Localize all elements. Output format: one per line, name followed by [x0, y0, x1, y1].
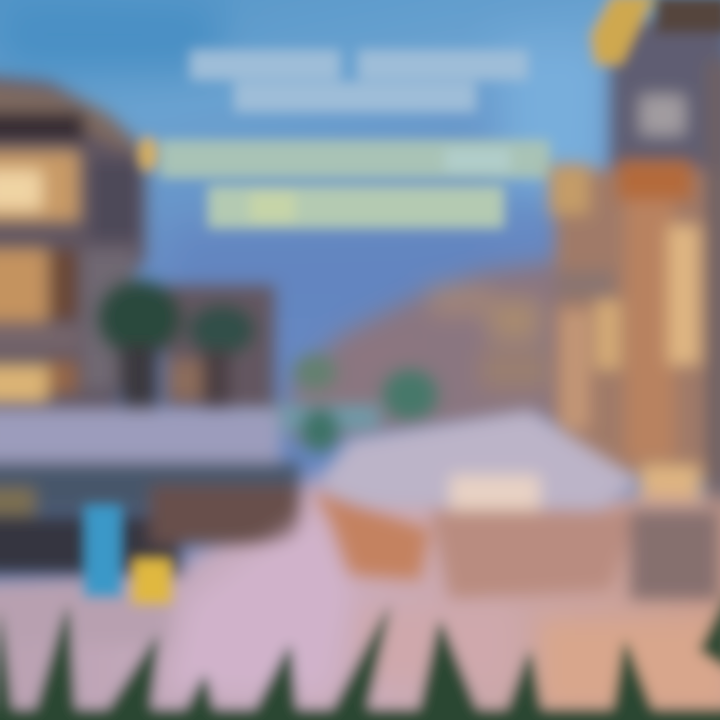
roof glow: [590, 0, 720, 65]
plaza light patches: [170, 510, 720, 710]
plaza ground: [0, 480, 720, 720]
left building: [0, 75, 158, 480]
foreground foliage: [0, 590, 720, 720]
glowing windows: [0, 150, 80, 404]
central lounge canopies: [315, 410, 720, 600]
building body: [0, 75, 146, 480]
roof accent: [138, 136, 158, 172]
tower body: [555, 20, 720, 480]
blurred title: lower yellow-green lines: [160, 140, 550, 228]
sky highlight: [0, 0, 610, 320]
left pool deck band: [0, 408, 300, 645]
blurred title: upper white lines: [190, 50, 528, 112]
distant hillside resort: [290, 258, 575, 440]
distant green trees and pool: [235, 354, 438, 452]
right tower: [550, 0, 720, 620]
blue and yellow accents: [84, 505, 172, 604]
orange columns: [550, 60, 720, 620]
mid-left palms and pavilion: [98, 280, 275, 455]
